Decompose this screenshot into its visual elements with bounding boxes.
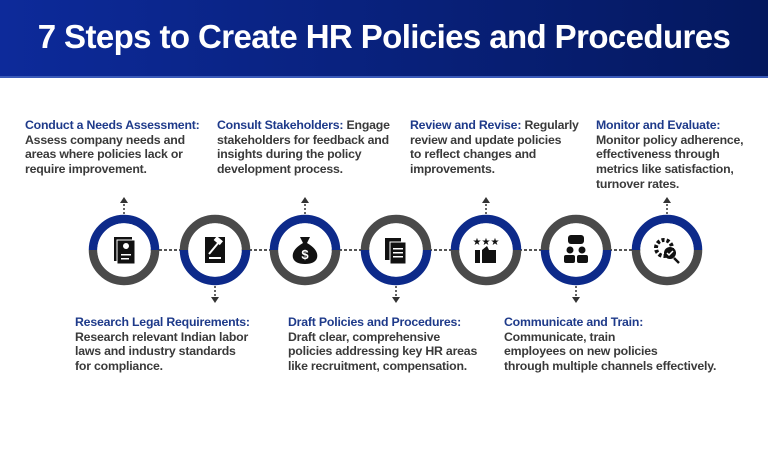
text: step 3: insights during the policy	[217, 147, 361, 161]
text: step 5: improvements.	[410, 162, 495, 176]
text: step 5: Review and Revise: Regularly	[410, 118, 579, 132]
text: step 6	[504, 315, 716, 373]
text: step 3: Consult Stakeholders: Engage	[217, 118, 390, 132]
text: step 6: Communicate, train	[504, 330, 615, 344]
title: 7 Steps to Create HR Policies and Procedures	[38, 18, 730, 55]
text: step 2	[75, 315, 250, 373]
text: step 1: require improvement.	[25, 162, 147, 176]
step 5 circle: thumbs up stars icon: ★★★	[473, 237, 499, 248]
step 5 circle: thumbs up stars icon	[455, 197, 517, 281]
text: step 6: Communicate and Train:	[504, 315, 643, 329]
text: step 5: review and update policies	[410, 133, 561, 147]
text: step 7	[596, 118, 743, 191]
text: step 7: Monitor and Evaluate:	[596, 118, 720, 132]
step 3 circle: money bag icon: $	[301, 247, 309, 262]
step 2 circle: gavel icon	[184, 219, 246, 303]
title	[0, 0, 768, 78]
text: step 7: turnover rates.	[596, 177, 679, 191]
text: step 3: stakeholders for feedback and	[217, 133, 389, 147]
text: step 5	[410, 118, 579, 176]
text: step 5: to reflect changes and	[410, 147, 536, 161]
step 3 circle: money bag icon	[274, 197, 336, 281]
text: step 7: Monitor policy adherence,	[596, 133, 743, 147]
text: step 1	[25, 118, 200, 176]
text: step 7: metrics like satisfaction,	[596, 162, 734, 176]
text: step 2: Research Legal Requirements:	[75, 315, 250, 329]
text: step 3	[217, 118, 390, 176]
text: step 2: for compliance.	[75, 359, 163, 373]
text: step 7: effectiveness through	[596, 147, 720, 161]
text: step 6: through multiple channels effectively.	[504, 359, 716, 373]
text: step 4	[288, 315, 477, 373]
text: step 4: Draft Policies and Procedures:	[288, 315, 461, 329]
text: step 1: Assess company needs and	[25, 133, 185, 147]
step 6 circle: people chat icon	[545, 219, 607, 303]
text: step 2: Research relevant Indian labor	[75, 330, 248, 344]
step 7 circle: gear magnifier icon	[636, 197, 698, 281]
text: step 4: like recruitment, compensation.	[288, 359, 467, 373]
text: step 4: policies addressing key HR areas	[288, 344, 477, 358]
text: step 1: areas where policies lack or	[25, 147, 183, 161]
step 1 circle: document icon	[93, 197, 155, 281]
text: step 2: laws and industry standards	[75, 344, 236, 358]
text: step 4: Draft clear, comprehensive	[288, 330, 440, 344]
text: step 1: Conduct a Needs Assessment:	[25, 118, 200, 132]
step 4 circle: documents icon	[365, 219, 427, 303]
text: step 3: development process.	[217, 162, 343, 176]
text: step 6: employees on new policies	[504, 344, 658, 358]
